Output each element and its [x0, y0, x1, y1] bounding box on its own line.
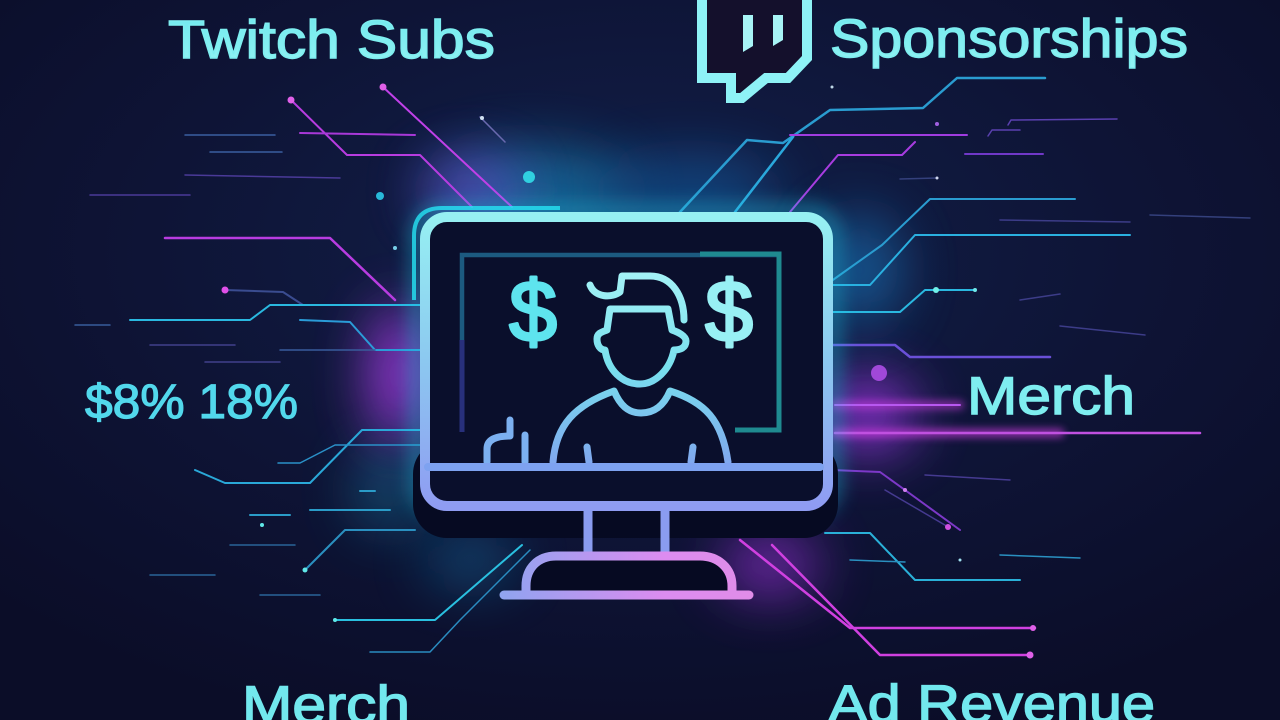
icon: Twitch logo [702, 0, 807, 98]
label: Sponsorships: Sponsorships [830, 9, 1188, 69]
circuit lines: upper left [90, 84, 535, 250]
monitor stand [588, 510, 665, 552]
thumbs up icon [487, 420, 525, 462]
label: percentages: $8% 18% [85, 376, 298, 429]
label: Twitch Subs: Twitch Subs [168, 10, 495, 70]
streamer figure [553, 276, 728, 462]
circuit lines: upper right [680, 78, 1250, 218]
monitor neon glow [418, 212, 833, 510]
circuit lines: lower left [150, 430, 530, 652]
monitor dark body [413, 440, 838, 538]
monitor base [526, 556, 732, 594]
monitor screen bezel [425, 217, 828, 506]
monitor base bar [504, 590, 749, 600]
monitor [413, 208, 838, 595]
dollar sign right: $ [705, 264, 753, 360]
circuit lines: middle left [75, 238, 420, 362]
monitor divider [428, 463, 820, 471]
label: Merch right: Merch [967, 367, 1135, 426]
circuit lines: middle right [830, 199, 1145, 381]
ambient glow behind monitor [355, 150, 916, 595]
neon edge top left [414, 208, 560, 300]
circuit lines: lower right [740, 470, 1080, 658]
circuit lines: glowing magenta right [835, 405, 1200, 433]
inner screen frame [462, 254, 779, 432]
dollar sign left: $ [509, 264, 557, 360]
